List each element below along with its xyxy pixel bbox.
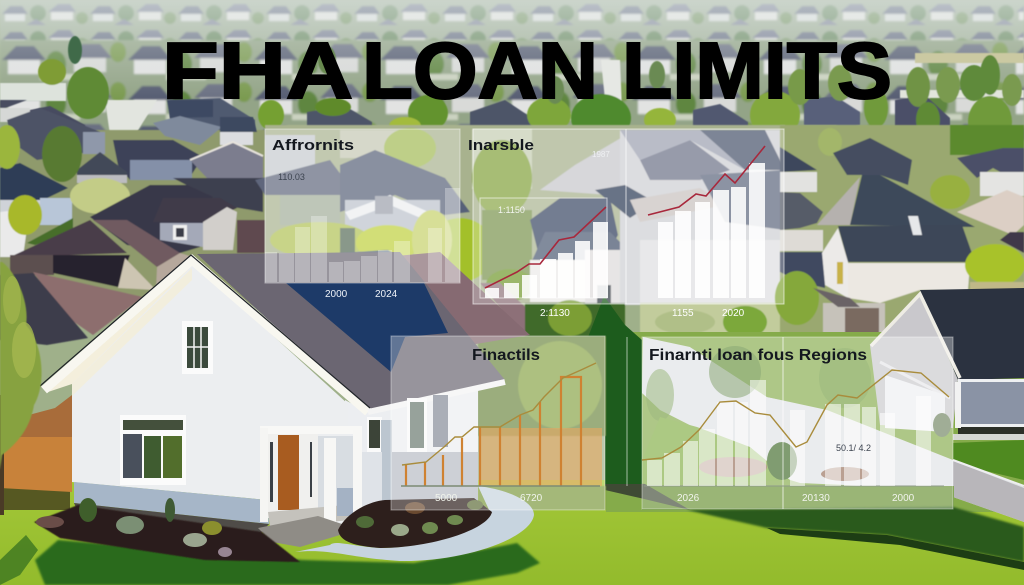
panel: Finarnti loan fous Regions chart: 2000 — [892, 493, 915, 504]
axis labels under second panel: 2020 — [722, 308, 745, 319]
panel: Finactils chart — [391, 336, 605, 510]
title: FHA — [162, 26, 353, 115]
neighbourhood houses: right side — [775, 125, 1024, 340]
title — [162, 26, 892, 115]
door — [278, 435, 299, 510]
neighbouring roofs behind main house — [396, 252, 530, 345]
trend line — [402, 363, 596, 465]
photo background: distant neighbourhood — [0, 0, 1024, 148]
fence band — [480, 428, 602, 486]
axis labels under second panel — [540, 308, 745, 319]
attic window — [182, 321, 213, 374]
right window and shutter — [407, 398, 427, 452]
columns — [324, 438, 336, 528]
neighbourhood houses: left side — [0, 100, 265, 345]
axis labels under first panel — [325, 289, 398, 300]
porch frame — [260, 426, 362, 434]
main wall — [72, 262, 348, 530]
axis labels: 2026 — [677, 493, 700, 504]
walkway — [295, 486, 534, 561]
centre tree — [585, 296, 642, 484]
axis labels under first panel: 2024 — [375, 289, 398, 300]
porch floor — [268, 505, 350, 528]
gable trim — [44, 260, 368, 412]
fence — [0, 437, 72, 492]
value label: 110.03 — [278, 172, 305, 182]
heading: Affrornits — [272, 137, 354, 154]
roof — [197, 252, 505, 412]
stone base — [74, 482, 269, 524]
axis labels under second panel: 1155 — [672, 308, 694, 319]
title: LIMITS — [622, 26, 892, 115]
bars — [485, 163, 765, 298]
panel: Inarsble chart — [468, 129, 784, 304]
main house — [0, 252, 505, 547]
lower window — [120, 415, 186, 485]
porch steps — [258, 516, 345, 547]
trend line — [642, 370, 949, 460]
panel: Finactils chart: 6720 — [520, 493, 543, 504]
bars — [265, 188, 460, 282]
flower bed left — [34, 498, 300, 562]
panel: Inarsble chart: 1:1150 — [498, 205, 525, 215]
P3 background foliage — [478, 336, 606, 510]
trend line — [485, 207, 606, 288]
neighbourhood houses: centre — [255, 125, 800, 345]
porch interior — [318, 436, 356, 520]
right garage house — [870, 288, 1024, 440]
panel: Finarnti loan fous Regions chart: 20130 — [802, 493, 830, 504]
road and front yards — [605, 332, 1024, 570]
panel: Finarnti loan fous Regions chart — [627, 337, 953, 509]
bars — [647, 380, 931, 486]
flower bed right — [338, 498, 492, 548]
axis labels: 5000 — [435, 493, 458, 504]
axis labels under second panel: 2:1130 — [540, 308, 570, 319]
lawn and ground — [0, 480, 1024, 585]
title: LOAN — [362, 26, 598, 115]
side window — [367, 417, 382, 452]
heading: Inarsble — [468, 137, 534, 154]
bars — [406, 377, 581, 486]
left tree — [0, 262, 42, 515]
value labels: 1987 — [592, 150, 610, 159]
heading: Finarnti loan fous Regions — [649, 347, 867, 364]
side wall — [345, 388, 478, 510]
axis labels under first panel: 2000 — [325, 289, 348, 300]
heading: Finactils — [472, 347, 540, 364]
value label: 50.1/ 4.2 — [836, 443, 871, 453]
panel: Affrornits chart — [265, 129, 460, 283]
